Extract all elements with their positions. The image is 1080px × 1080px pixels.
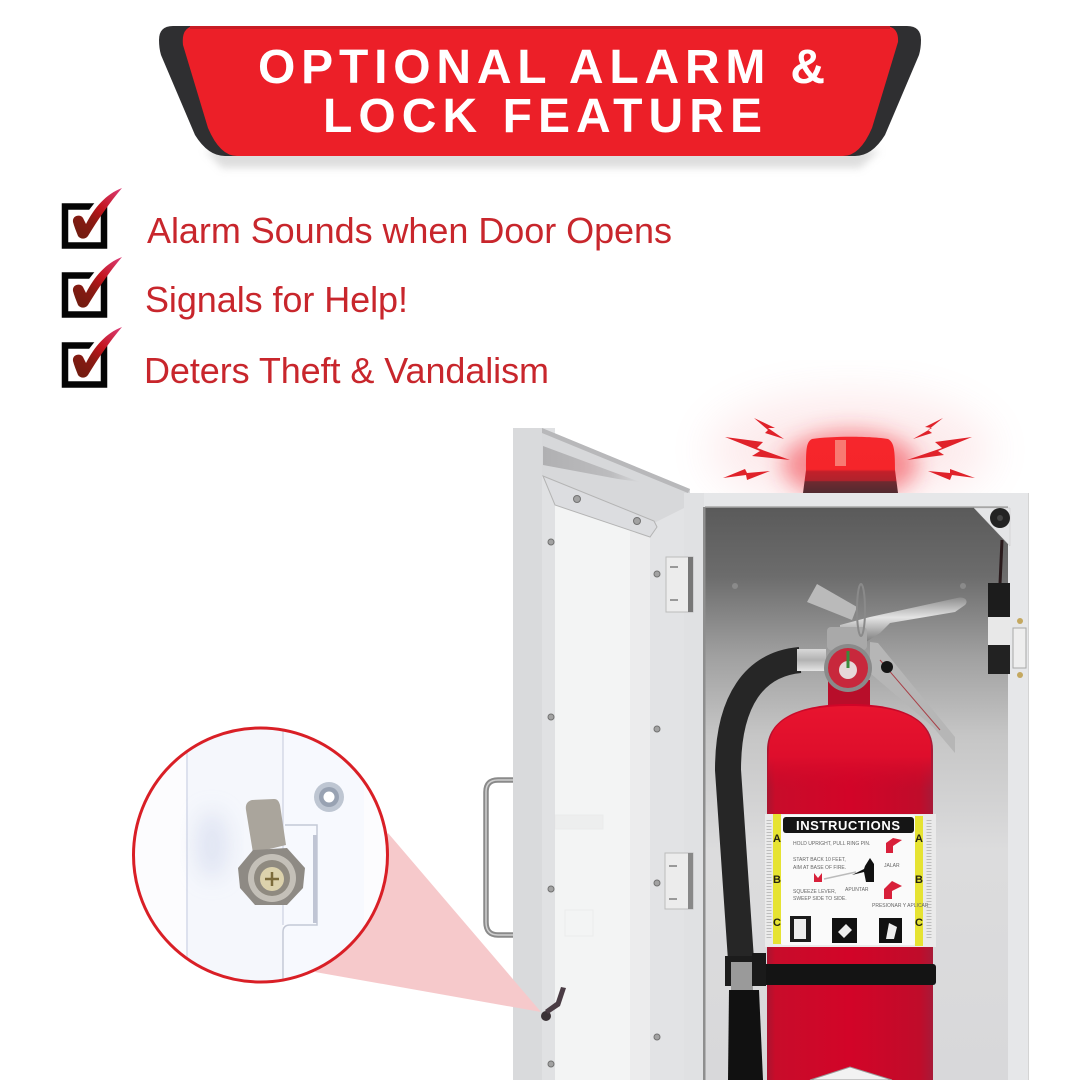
instruction steps: PRESIONAR Y APLICAR <box>872 903 929 909</box>
lock detail circle <box>130 725 390 985</box>
lock nut <box>238 848 305 905</box>
icon: checkbox 1 <box>65 188 122 246</box>
door window glass <box>555 505 650 1080</box>
title line 2: LOCK FEATURE <box>323 90 762 143</box>
washer nut <box>314 782 344 812</box>
bottom diamond label <box>810 1067 892 1080</box>
instruction label <box>765 814 936 947</box>
open door <box>486 428 706 1080</box>
title banner <box>159 26 921 168</box>
cabinet interior <box>705 507 1010 1080</box>
valve block <box>827 627 867 650</box>
icon: checkbox 2 <box>65 257 122 314</box>
door screws <box>548 496 660 1067</box>
beacon glow <box>710 395 990 505</box>
recess shadow band <box>543 446 640 482</box>
class letters: A <box>773 833 781 845</box>
hinge lower <box>665 853 693 909</box>
instruction steps: APUNTAR <box>845 887 869 893</box>
class letters: A <box>915 833 923 845</box>
corner plate <box>974 508 1010 546</box>
mounting strap <box>752 953 936 986</box>
banner red plate <box>183 26 898 156</box>
cabinet frame <box>690 493 1029 1080</box>
wire <box>1000 540 1002 584</box>
neck <box>828 680 870 710</box>
text: deters theft: Deters Theft & Vandalism <box>144 350 549 391</box>
door handle <box>486 780 513 935</box>
cylinder shoulder highlight <box>767 706 931 790</box>
instruction steps: SWEEP SIDE TO SIDE. <box>793 896 847 902</box>
banner dark wings <box>159 26 921 156</box>
circle outline <box>134 728 388 982</box>
alarm beacon <box>723 418 975 493</box>
icon: checkbox 3 <box>65 327 122 384</box>
text: signals for help: Signals for Help! <box>145 279 408 320</box>
black pin <box>881 661 893 673</box>
class letters: C <box>773 917 781 929</box>
fire extinguisher <box>725 584 967 1080</box>
top handle <box>840 598 967 642</box>
beacon dome <box>803 437 898 493</box>
ring pin <box>857 584 865 636</box>
instruction steps: AIM AT BASE OF FIRE. <box>793 865 846 871</box>
small lock on door <box>541 987 566 1021</box>
callout cone <box>315 833 541 1012</box>
class letters: C <box>915 917 923 929</box>
hinge upper <box>666 557 693 612</box>
class icons <box>790 916 902 943</box>
side print <box>769 820 929 940</box>
door surface <box>364 839 386 926</box>
gauge <box>824 644 872 692</box>
door top recess <box>542 428 690 545</box>
door outer edge <box>542 428 555 1080</box>
lock screw <box>260 867 284 891</box>
alarm box <box>988 583 1010 674</box>
banner shadow <box>205 150 880 168</box>
lock latch tab <box>246 799 286 853</box>
cylinder <box>767 704 933 1080</box>
hose ferrule <box>797 649 826 671</box>
lower lever <box>870 642 955 753</box>
instruction steps: START BACK 10 FEET, <box>793 857 846 863</box>
hose clamp <box>725 956 765 990</box>
right door latch <box>1013 618 1026 678</box>
hazard strip right <box>915 816 923 946</box>
label heading bar <box>783 817 914 833</box>
instruction steps: HOLD UPRIGHT, PULL RING PIN. <box>793 841 870 847</box>
ghost label in glass <box>555 815 603 936</box>
hazard strip left <box>773 814 781 944</box>
lightning bolts right <box>907 418 975 480</box>
interior screws <box>732 583 966 589</box>
instruction steps: SQUEEZE LEVER, <box>793 889 836 895</box>
door right strip <box>650 505 690 1080</box>
safety tag <box>807 584 857 620</box>
text: alarm sounds: Alarm Sounds when Door Opens <box>147 210 672 251</box>
title line 1: OPTIONAL ALARM & <box>258 41 825 94</box>
class letters: B <box>915 874 923 886</box>
latch notch <box>283 825 317 985</box>
instruction steps <box>793 841 929 909</box>
feature list <box>65 188 672 391</box>
alarm sensor and battery <box>732 508 1026 678</box>
hose nozzle <box>728 990 763 1080</box>
label white panel <box>781 815 915 945</box>
class letters: B <box>773 874 781 886</box>
window bracket <box>543 476 657 537</box>
diagram figures <box>814 838 902 899</box>
hose <box>728 660 800 960</box>
class letters <box>773 833 923 929</box>
instruction steps: JALAR <box>884 863 900 869</box>
label heading: INSTRUCTIONS <box>796 818 900 833</box>
lightning bolts left <box>723 418 790 480</box>
sensor <box>990 508 1010 528</box>
cabinet <box>486 428 1029 1080</box>
